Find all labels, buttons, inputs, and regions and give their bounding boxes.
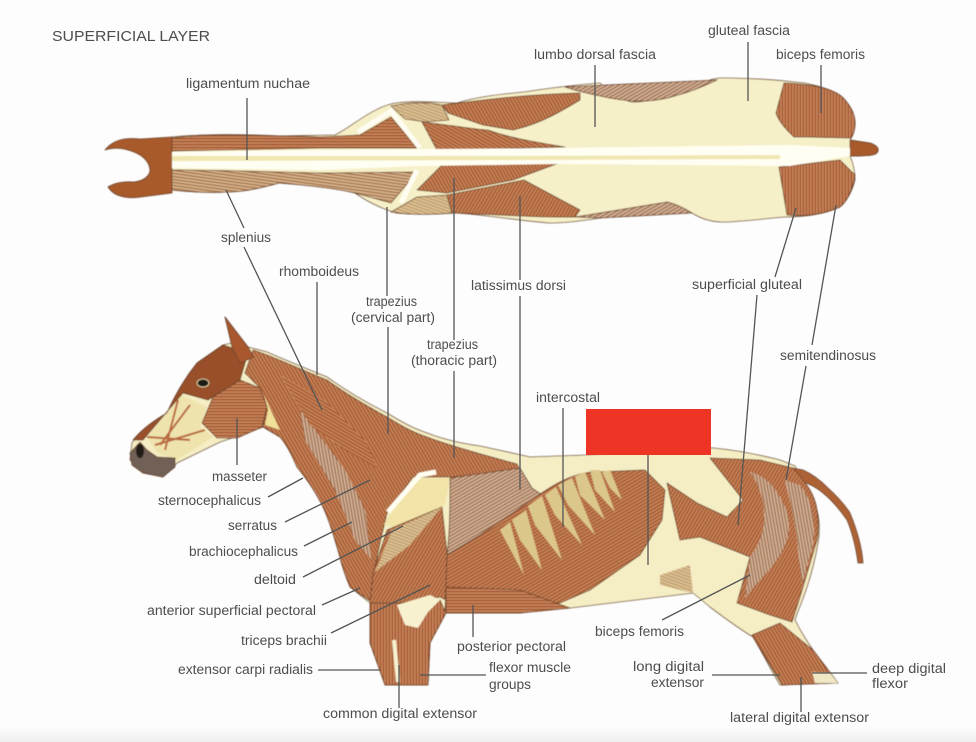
muscle: tail bbox=[793, 468, 863, 563]
label: anterior superficial pectoral: anterior superficial pectoral bbox=[147, 603, 316, 618]
label: flexor muscle groups bbox=[420, 660, 571, 692]
muscle: tail bbox=[850, 140, 878, 156]
label: trapezius cervical part bbox=[351, 207, 435, 434]
label: trapezius cervical part: trapezius bbox=[366, 294, 417, 309]
muscle: lower scapula bbox=[391, 195, 452, 214]
muscle: superficial gluteal strap bbox=[745, 472, 789, 598]
label: deep digital flexor: flexor bbox=[872, 676, 909, 691]
label: biceps femoris lower bbox=[595, 575, 750, 639]
muscle: deltoid band bbox=[375, 507, 442, 572]
label: deep digital flexor: deep digital bbox=[872, 661, 946, 676]
illustration: horse seen from above bbox=[105, 78, 878, 223]
label: superficial gluteal: superficial gluteal bbox=[692, 277, 802, 292]
label: brachiocephalicus: brachiocephalicus bbox=[189, 544, 298, 559]
cream throat patch bbox=[264, 395, 280, 430]
label: semitendinosus: semitendinosus bbox=[780, 348, 876, 363]
muscle: hind quarter bbox=[667, 458, 818, 622]
label: flexor muscle groups: groups bbox=[489, 677, 531, 692]
muscle: lower thoracic trapezius bbox=[417, 163, 559, 193]
label: long digital extensor: extensor bbox=[651, 675, 705, 690]
label: ligamentum nuchae: ligamentum nuchae bbox=[186, 76, 310, 91]
label: serratus: serratus bbox=[228, 518, 277, 533]
muscle: lower neck bbox=[172, 170, 417, 203]
label: extensor carpi radialis: extensor carpi radialis bbox=[178, 662, 313, 677]
illustration: horse side view bbox=[130, 317, 863, 685]
label: trapezius cervical part: (cervical part) bbox=[351, 310, 435, 325]
muscle: shoulder cream bbox=[384, 478, 450, 530]
icon: head dark brown bbox=[133, 345, 248, 440]
muscle: masseter bbox=[202, 380, 267, 438]
muscle: face straps bbox=[147, 395, 213, 460]
muscle: semitendinosus bbox=[785, 480, 814, 585]
label: posterior pectoral: posterior pectoral bbox=[457, 639, 566, 654]
label: brachiocephalicus bbox=[189, 522, 352, 559]
label: intercostal bbox=[536, 390, 600, 527]
label: splenius bbox=[221, 190, 322, 410]
label: long digital extensor: long digital bbox=[633, 659, 704, 674]
label: flexor muscle groups: flexor muscle bbox=[489, 660, 571, 675]
label: biceps femoris top bbox=[776, 47, 865, 113]
cream elbow patch bbox=[397, 595, 440, 628]
muscle: shoulder bbox=[370, 507, 447, 603]
label: intercostal: intercostal bbox=[536, 390, 600, 405]
label: lumbo dorsal fascia bbox=[534, 47, 657, 127]
muscle: lower ribs bbox=[575, 202, 692, 218]
muscle: neck lighter stripe bbox=[300, 410, 372, 560]
label: deltoid: deltoid bbox=[254, 572, 296, 587]
muscle: lower latissimus bbox=[447, 180, 580, 217]
label: latissimus dorsi: latissimus dorsi bbox=[471, 278, 566, 293]
label: rhomboideus: rhomboideus bbox=[279, 264, 359, 279]
label: sternocephalicus: sternocephalicus bbox=[158, 493, 261, 508]
body outline bbox=[172, 78, 878, 223]
label: masseter bbox=[212, 418, 267, 484]
icon: eye bbox=[197, 379, 209, 387]
label: triceps brachii bbox=[241, 585, 430, 648]
label: trapezius thoracic part: (thoracic part) bbox=[411, 353, 497, 368]
label: trapezius thoracic part: trapezius bbox=[427, 337, 478, 352]
label: gluteal fascia: gluteal fascia bbox=[708, 23, 790, 38]
label: superficial gluteal bbox=[692, 208, 802, 525]
redaction block bbox=[586, 409, 711, 565]
muscle: lower biceps femoris bbox=[779, 160, 855, 216]
icon: muzzle bbox=[130, 442, 175, 477]
label: triceps brachii: triceps brachii bbox=[241, 633, 327, 648]
label: biceps femoris lower: biceps femoris bbox=[595, 624, 684, 639]
body outline bbox=[130, 317, 838, 685]
label: trapezius thoracic part bbox=[411, 178, 497, 458]
muscle: latissimus bbox=[447, 468, 545, 555]
icon: ears and poll bbox=[105, 137, 172, 198]
muscle: lower hind leg bbox=[752, 623, 838, 685]
label: sternocephalicus bbox=[158, 478, 303, 508]
label: serratus bbox=[228, 480, 370, 533]
label: long digital extensor bbox=[633, 659, 780, 690]
icon: ear bbox=[225, 317, 254, 363]
label: ligamentum nuchae bbox=[186, 76, 310, 160]
muscle: serrated cream teeth bbox=[500, 470, 622, 575]
muscle: upper scapula bbox=[391, 103, 449, 122]
label: lateral digital extensor: lateral digital extensor bbox=[730, 710, 870, 725]
muscle: upper neck bbox=[172, 117, 417, 151]
muscle: upper latissimus bbox=[442, 93, 580, 130]
ligamentum nuchae strip bbox=[172, 155, 780, 161]
label: gluteal fascia bbox=[708, 23, 790, 101]
muscle: face strap lines bbox=[147, 400, 205, 450]
cream tendon bbox=[812, 672, 838, 683]
label: biceps femoris top: biceps femoris bbox=[776, 47, 865, 62]
white shoulder streak bbox=[388, 472, 436, 512]
muscle: upper thoracic trapezius bbox=[422, 122, 565, 150]
label: splenius: splenius bbox=[221, 230, 271, 245]
muscle: upper foreleg bbox=[370, 600, 446, 685]
white cannon stripe bbox=[394, 640, 398, 682]
label: deltoid bbox=[254, 526, 403, 587]
label: rhomboideus bbox=[279, 264, 359, 375]
white spine strip bbox=[172, 145, 850, 170]
muscle: stifle shadow bbox=[660, 565, 693, 593]
muscle: intercostal ribs bbox=[445, 470, 665, 612]
muscle: posterior pectoral bbox=[446, 587, 570, 613]
label: semitendinosus bbox=[780, 205, 876, 480]
label: masseter: masseter bbox=[212, 469, 267, 484]
label: deep digital flexor bbox=[812, 661, 946, 691]
icon: nostril bbox=[136, 444, 144, 458]
label: anterior superficial pectoral bbox=[147, 588, 360, 618]
label: posterior pectoral bbox=[457, 605, 566, 654]
muscle: neck bbox=[245, 350, 520, 603]
label: lumbo dorsal fascia: lumbo dorsal fascia bbox=[534, 47, 657, 62]
label: common digital extensor: common digital extensor bbox=[323, 706, 478, 721]
label: lateral digital extensor bbox=[730, 677, 870, 725]
white scapula lines bbox=[358, 111, 420, 203]
muscle: upper biceps femoris bbox=[776, 83, 855, 138]
title: SUPERFICIAL LAYER bbox=[52, 28, 210, 45]
muscle: splenius bbox=[280, 375, 378, 470]
muscle: upper ribs bbox=[565, 80, 717, 101]
